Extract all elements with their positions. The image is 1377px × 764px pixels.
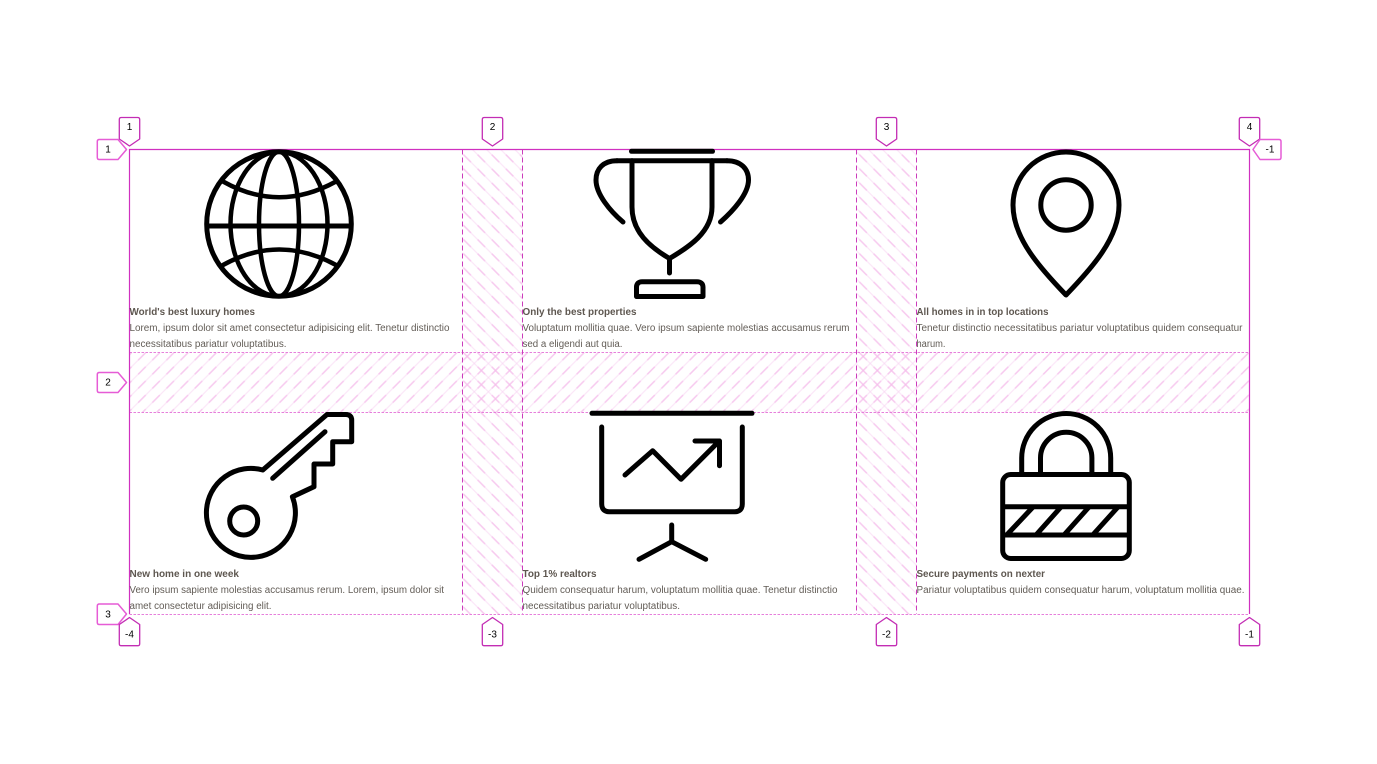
icon: presentation chart (592, 413, 752, 559)
text: world's best luxury homes: necessitatibus pariatur voluptatibus. (130, 339, 286, 350)
panel: only the best properties (522, 151, 850, 350)
grid line number badges: top: 1 (127, 122, 133, 133)
grid line number badges: bottom: -4 (125, 630, 134, 640)
grid line number badges: left: 3 (105, 610, 111, 620)
grid line number badges: bottom (119, 618, 1260, 646)
panel: top 1% realtors (522, 413, 838, 612)
icon: trophy (596, 151, 748, 296)
panel: secure payments on nexter (916, 414, 1244, 596)
text: new home in one week: amet consectetur adipisicing elit. (130, 601, 272, 612)
grid line number badge: right: -1 (1266, 144, 1275, 156)
grid line number badges: bottom: -2 (882, 630, 891, 640)
grid line number badges: top: 2 (490, 122, 496, 133)
panel: all homes in top locations (916, 152, 1243, 350)
grid line number badges: top: 3 (884, 122, 890, 133)
grid line number badge: right (1253, 140, 1281, 160)
text: all homes in top locations: All homes in in top locations (916, 307, 1049, 318)
text: top 1% realtors: Quidem consequatur harum, voluptatum mollitia quae. Tenetur distinctio (522, 585, 838, 596)
text: top 1% realtors (522, 569, 838, 612)
grid line number badges: top: 4 (1247, 122, 1253, 133)
text: only the best properties: Only the best properties (522, 307, 637, 318)
text: secure payments on nexter (916, 569, 1244, 596)
text: secure payments on nexter: Secure payments on nexter (916, 569, 1045, 580)
text: world's best luxury homes (130, 307, 450, 350)
grid line number badges: left: 1 (105, 144, 111, 156)
text: secure payments on nexter: Pariatur voluptatibus quidem consequatur harum, voluptatum mollitia quae. (916, 585, 1244, 596)
panel: new home in one week (130, 414, 444, 612)
text: new home in one week: New home in one week (130, 569, 239, 580)
icon: globe (207, 152, 351, 296)
icon: location pin (1013, 152, 1119, 295)
text: world's best luxury homes: World's best luxury homes (130, 307, 255, 318)
text: only the best properties: sed a eligendi aut quia. (522, 339, 622, 350)
grid line number badges: left: 2 (105, 378, 111, 388)
text: new home in one week: Vero ipsum sapiente molestias accusamus rerum. Lorem, ipsum dolor sit (130, 585, 444, 596)
icon: padlock (1003, 414, 1129, 558)
text: all homes in top locations: Tenetur distinctio necessitatibus pariatur voluptatibus quidem consequatur (916, 323, 1243, 334)
text: new home in one week (130, 569, 444, 612)
panel: world's best luxury homes (130, 152, 450, 350)
icon: key (206, 414, 352, 557)
text: top 1% realtors: necessitatibus pariatur voluptatibus. (522, 601, 680, 612)
grid line number badges: left (97, 140, 126, 624)
grid line number badges: bottom: -1 (1245, 630, 1254, 640)
text: world's best luxury homes: Lorem, ipsum dolor sit amet consectetur adipisicing elit. Tenetur distinctio (130, 323, 450, 334)
grid line number badges: top (119, 118, 1260, 146)
grid overlay: gaps and lines (130, 150, 1250, 614)
text: only the best properties (522, 307, 850, 350)
text: all homes in top locations: harum. (916, 339, 946, 350)
grid line number badges: bottom: -3 (488, 630, 497, 640)
text: top 1% realtors: Top 1% realtors (522, 569, 597, 580)
text: all homes in top locations (916, 307, 1243, 350)
text: only the best properties: Voluptatum mollitia quae. Vero ipsum sapiente molestias accusamus rerum (522, 323, 850, 334)
